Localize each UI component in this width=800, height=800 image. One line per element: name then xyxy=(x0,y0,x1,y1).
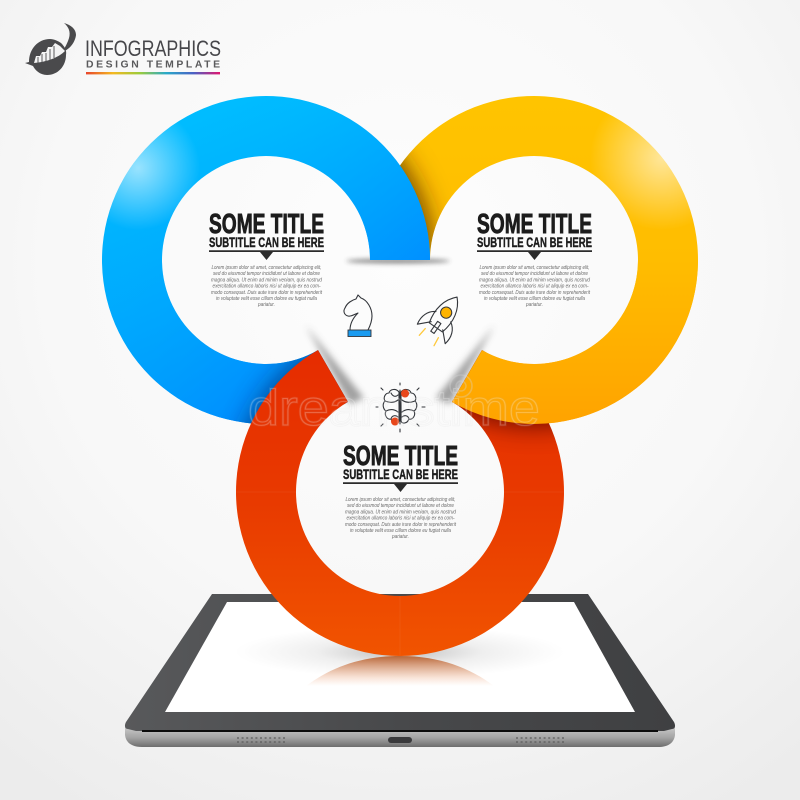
tablet port xyxy=(388,737,412,743)
logo subtitle: DESIGN TEMPLATE xyxy=(86,60,220,70)
body text: exercitation ullamco laboris nisi ut aliquip ex ea com- xyxy=(212,284,321,290)
body text: sed do eiusmod tempor incididunt ut labore et dolore xyxy=(481,271,588,277)
shadow cast on orange by blue ring xyxy=(400,148,444,256)
tablet silver edge xyxy=(125,727,675,747)
title: SOME TITLE xyxy=(209,208,324,239)
body text xyxy=(345,497,457,540)
body text: modo consequat. Duis aute irure dolor in reprehenderit xyxy=(345,522,457,528)
rainbow underline xyxy=(86,72,220,74)
tablet black bezel xyxy=(125,594,675,731)
body text: magna aliqua. Ut enim ad minim veniam, quis nostrud xyxy=(211,277,322,283)
logo xyxy=(25,23,221,75)
icon: rocket xyxy=(412,287,471,351)
body text: modo consequat. Duis aute irure dolor in reprehenderit xyxy=(211,290,323,296)
text block: orange xyxy=(477,208,592,308)
body text: sed do eiusmod tempor incididunt ut labore et dolore xyxy=(347,503,454,509)
title: SOME TITLE xyxy=(477,208,592,239)
divider pointer xyxy=(209,250,324,260)
text block: blue xyxy=(209,208,324,308)
floor shadow xyxy=(235,626,565,678)
subtitle: SUBTITLE CAN BE HERE xyxy=(477,235,592,250)
logo title: INFOGRAPHICS xyxy=(85,36,221,61)
title: SOME TITLE xyxy=(343,440,458,471)
body text: pariatur. xyxy=(257,302,275,308)
body text xyxy=(211,265,323,308)
body text: in voluptate velit esse cillum dolore eu fugiat nulla xyxy=(484,296,585,302)
body text: Lorem ipsum dolor sit amet, consectetur adipiscing elit, xyxy=(480,265,590,271)
ring: orange xyxy=(370,96,698,424)
body text: exercitation ullamco laboris nisi ut aliquip ex ea com- xyxy=(346,516,455,522)
red cut shadow xyxy=(306,326,364,404)
speaker left xyxy=(237,738,285,742)
divider pointer xyxy=(477,250,592,260)
speaker right xyxy=(516,738,564,742)
shadow cast on blue by red ring xyxy=(231,351,340,424)
body text: pariatur. xyxy=(391,534,409,540)
body text: Lorem ipsum dolor sit amet, consectetur adipiscing elit, xyxy=(212,265,322,271)
blue cut shadow xyxy=(346,258,450,264)
body text xyxy=(479,265,591,308)
body text: magna aliqua. Ut enim ad minim veniam, quis nostrud xyxy=(345,509,456,515)
logo mark xyxy=(25,23,76,75)
body text: in voluptate velit esse cillum dolore eu fugiat nulla xyxy=(216,296,317,302)
body text: sed do eiusmod tempor incididunt ut labore et dolore xyxy=(213,271,320,277)
text block: red xyxy=(343,440,458,540)
body text: exercitation ullamco laboris nisi ut aliquip ex ea com- xyxy=(480,284,589,290)
ring reflection xyxy=(306,656,494,686)
body text: Lorem ipsum dolor sit amet, consectetur adipiscing elit, xyxy=(346,497,456,503)
icon: brain xyxy=(376,383,425,432)
ring: blue xyxy=(102,96,430,424)
watermark: dreamstime xyxy=(248,380,540,436)
body text: magna aliqua. Ut enim ad minim veniam, quis nostrud xyxy=(479,277,590,283)
divider pointer xyxy=(343,482,458,492)
tablet screen xyxy=(165,602,635,712)
orange cut shadow xyxy=(436,326,494,404)
body text: in voluptate velit esse cillum dolore eu fugiat nulla xyxy=(350,528,451,534)
tablet xyxy=(125,594,675,747)
shadow cast on red by orange ring xyxy=(452,350,556,444)
ring: red xyxy=(236,350,564,656)
body text: modo consequat. Duis aute irure dolor in reprehenderit xyxy=(479,290,591,296)
subtitle: SUBTITLE CAN BE HERE xyxy=(209,235,324,250)
body text: pariatur. xyxy=(525,302,543,308)
watermark: dreamstime xyxy=(248,380,540,436)
icon: chess knight xyxy=(344,295,372,336)
subtitle: SUBTITLE CAN BE HERE xyxy=(343,467,458,482)
ring: orange head xyxy=(452,260,698,424)
